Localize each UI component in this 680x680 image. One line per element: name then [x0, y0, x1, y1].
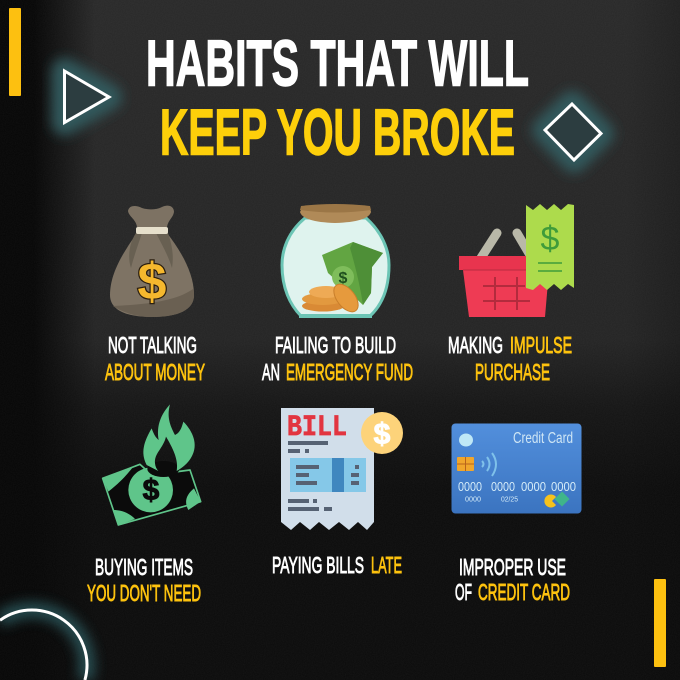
money in jar: $ — [339, 270, 348, 287]
label: paying bills late: LATE — [371, 552, 402, 578]
icon: credit card: 0000 — [465, 494, 481, 504]
icon: neon circle — [0, 610, 87, 680]
icon: burning money: $ — [143, 474, 160, 507]
label: failing to build an emergency fund: AN — [262, 359, 280, 385]
title — [146, 26, 529, 168]
icon: credit card: 0000 — [491, 479, 515, 494]
icon: bill receipt: BILL — [287, 411, 347, 445]
icon: bill receipt — [281, 408, 403, 530]
label: buying items you don't need: YOU DON'T NEED — [87, 580, 201, 606]
icon: credit card: Credit Card — [513, 430, 573, 447]
label: paying bills late: PAYING BILLS — [272, 552, 364, 578]
icon: neon diamond — [545, 104, 601, 160]
label: failing to build an emergency fund: EMERGENCY FUND — [286, 359, 413, 385]
label: failing to build an emergency fund — [262, 332, 413, 385]
label: making impulse purchase: PURCHASE — [475, 359, 550, 385]
label: not talking about money: NOT TALKING — [108, 332, 197, 358]
label: buying items you don't need: BUYING ITEMS — [95, 554, 193, 580]
icon: credit card: 02/25 — [501, 494, 518, 504]
label: improper use of credit card: IMPROPER USE — [459, 554, 566, 580]
receipt: $ — [541, 220, 560, 258]
label: making impulse purchase: MAKING — [448, 332, 503, 358]
icon: neon triangle — [64, 71, 109, 122]
icon: dollar sign on bag: $ — [138, 253, 167, 311]
icon: credit card — [452, 424, 582, 514]
label: making impulse purchase — [448, 332, 572, 385]
label: improper use of credit card — [455, 554, 570, 605]
label: making impulse purchase: IMPULSE — [510, 332, 572, 358]
icon: credit card: 0000 — [521, 479, 546, 494]
coin: $ — [374, 418, 391, 451]
label: failing to build an emergency fund: FAILING TO BUILD — [275, 332, 396, 358]
coins in jar — [302, 280, 363, 316]
label: buying items you don't need — [87, 554, 201, 606]
icon: burning money — [103, 404, 201, 525]
accent bar: bottom right — [654, 579, 666, 667]
label: improper use of credit card: CREDIT CARD — [478, 579, 570, 605]
icon: money bag — [110, 206, 194, 317]
icon: savings jar — [282, 204, 389, 318]
accent bar: top left — [9, 8, 21, 96]
icon: credit card: 0000 — [458, 479, 482, 494]
label: improper use of credit card: OF — [455, 579, 472, 605]
icon: credit card: 0000 — [551, 479, 576, 494]
icon: shopping basket with receipt — [459, 204, 574, 317]
label: not talking about money — [105, 332, 205, 385]
label: not talking about money: ABOUT MONEY — [105, 359, 205, 385]
